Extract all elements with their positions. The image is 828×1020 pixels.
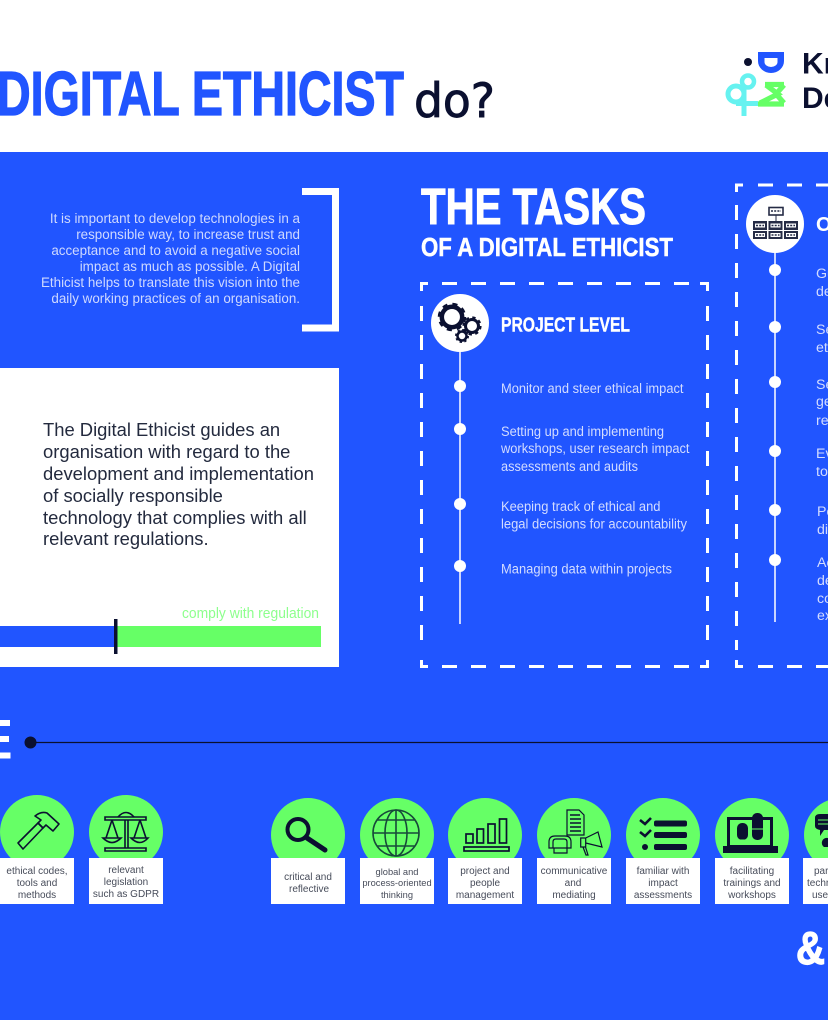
skill label text: mediating <box>552 890 596 901</box>
intro text <box>41 211 301 306</box>
heading: the tasks: THE TASKS <box>421 178 646 235</box>
skill label text: thinking <box>381 890 413 900</box>
timeline dots <box>454 380 466 572</box>
skill label text: communicative <box>541 866 608 877</box>
icon: magnifier <box>288 819 325 850</box>
panel: project level <box>422 284 708 666</box>
organisation tasks: et <box>816 340 828 356</box>
bracket <box>302 192 336 328</box>
organisation tasks: to <box>816 464 828 480</box>
icon: globe <box>373 810 419 856</box>
skill label text: trainings and <box>723 878 781 889</box>
project tasks <box>500 381 690 578</box>
definition text: organisation with regard to the <box>43 441 290 462</box>
skill label cards <box>0 858 828 904</box>
skill label text: methods <box>18 890 56 901</box>
skill label text: familiar with <box>637 866 689 877</box>
icon: document and megaphone <box>549 810 602 855</box>
panel: definition <box>0 368 339 667</box>
intro text: It is important to develop technologies in a <box>50 211 301 226</box>
icon: checklist <box>640 818 687 850</box>
intro text: daily working practices of an organisation. <box>51 291 300 306</box>
skill label text: global and <box>376 867 418 877</box>
icon: laptop with footprints <box>723 813 778 853</box>
icon: scales <box>103 812 148 851</box>
definition text <box>43 419 314 549</box>
green skill circles <box>0 795 828 872</box>
project tasks: assessments and audits <box>501 459 638 475</box>
skill label text: and <box>565 878 581 889</box>
skill label text: impact <box>648 878 678 889</box>
skill label text: reflective <box>289 884 329 895</box>
skill label text: people <box>470 878 500 889</box>
skill label text: tools and <box>17 878 57 889</box>
compliance bar <box>0 605 321 654</box>
organisation tasks <box>816 266 828 624</box>
skill label text: facilitating <box>730 866 774 877</box>
skill label text: workshops <box>727 890 776 901</box>
icon: organisation chart <box>746 195 804 253</box>
title: DIGITAL ETHICIST <box>0 60 404 129</box>
project tasks: workshops, user research impact <box>500 441 690 457</box>
heading: the tasks: OF A DIGITAL ETHICIST <box>421 232 673 262</box>
skill label text <box>6 865 828 901</box>
skill label text: such as GDPR <box>93 889 159 900</box>
skill label text: project and <box>460 866 510 877</box>
project tasks: legal decisions for accountability <box>501 516 688 532</box>
skill label text: management <box>456 890 514 901</box>
icon: speech bubble <box>815 814 828 847</box>
definition text: The Digital Ethicist guides an <box>43 419 280 440</box>
heading fragment: cropped letter <box>0 720 10 758</box>
skill label text: critical and <box>284 872 332 883</box>
timeline dots <box>769 264 781 566</box>
definition text: relevant regulations. <box>43 528 209 549</box>
intro text: Ethicist helps to translate this vision into the <box>41 275 300 290</box>
heading: project level: PROJECT LEVEL <box>501 314 630 336</box>
logo <box>728 48 828 116</box>
heading: the tasks <box>421 178 673 262</box>
project tasks: Keeping track of ethical and <box>501 499 660 515</box>
skill label text: assessments <box>634 890 692 901</box>
project tasks: Monitor and steer ethical impact <box>501 381 684 397</box>
skill label text: process-oriented <box>362 878 432 888</box>
icon: gears <box>431 294 489 352</box>
organisation tasks: di <box>817 522 828 538</box>
skill label text: ethical codes, <box>6 866 68 877</box>
skill label text: legislation <box>104 877 148 888</box>
definition text: of socially responsible <box>43 485 223 506</box>
skill label text: relevant <box>108 865 144 876</box>
project tasks: Managing data within projects <box>501 562 672 578</box>
title: do? <box>414 74 495 129</box>
panel: organisation level <box>736 185 828 666</box>
definition text: technology that complies with all <box>43 507 307 528</box>
intro text: responsible way, to increase trust and <box>76 227 300 242</box>
icon: hammer <box>18 812 59 849</box>
definition text: development and implementation <box>43 463 314 484</box>
intro text: acceptance and to avoid a negative social <box>51 243 300 258</box>
project tasks: Setting up and implementing <box>501 424 664 440</box>
compliance bar: comply with regulation <box>182 605 319 622</box>
intro text: impact as much as possible. A Digital <box>80 259 300 274</box>
icon: bar chart <box>464 819 509 851</box>
skill label text: use <box>812 890 828 901</box>
timeline <box>24 736 828 748</box>
